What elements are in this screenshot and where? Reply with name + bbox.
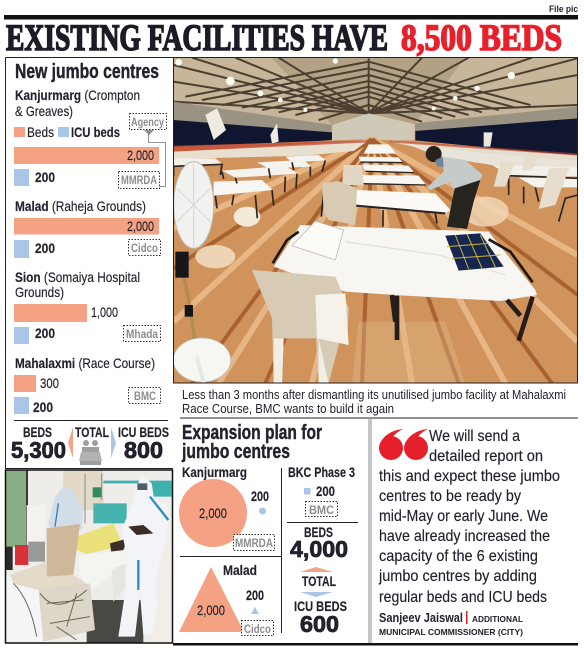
side walls <box>174 102 332 133</box>
totals row: BEDS <box>23 424 52 440</box>
quote text <box>378 428 560 606</box>
front chair <box>252 270 349 383</box>
front bed <box>274 225 537 301</box>
quote text: centres to be ready by <box>379 488 521 505</box>
heading: expansion plan: Expansion plan for <box>182 422 322 444</box>
photo caption: Race Course, BMC wants to build it again <box>182 402 394 416</box>
expansion totals: 4,000 <box>290 536 348 562</box>
legend: beds and ICU beds <box>14 124 120 140</box>
Malad entry: Malad (Raheja Grounds) <box>15 198 146 214</box>
quote text: capacity of the 6 existing <box>379 548 538 565</box>
Kanjurmarg circle chart: 200 <box>251 488 269 504</box>
pedestal fan <box>174 162 214 248</box>
totals row <box>11 424 169 465</box>
expansion totals: TOTAL <box>302 573 336 589</box>
totals row: 800 <box>124 437 163 463</box>
floor <box>174 139 389 152</box>
far rows of beds <box>174 140 369 159</box>
BKC Phase 3: BKC Phase 3 <box>288 464 355 480</box>
quote text: mid-May or early June. We <box>379 508 548 525</box>
Malad triangle chart: 200 <box>246 587 264 603</box>
quote attribution: MUNICIPAL COMMISSIONER (CITY) <box>379 627 523 637</box>
panel: expansion plan <box>179 422 358 637</box>
heading: expansion plan: jumbo centres <box>181 441 290 463</box>
quote text: regular beds and ICU beds <box>379 589 547 606</box>
ceiling <box>174 58 578 125</box>
BKC Phase 3: BMC <box>309 503 334 517</box>
agency tag: MMRDA <box>118 172 160 188</box>
person making bed <box>427 157 483 190</box>
chairs <box>342 165 364 185</box>
quote attribution: ADDITIONAL <box>472 614 523 624</box>
bottom rule <box>173 643 578 646</box>
quote attribution: Sanjeev Jaiswal <box>379 610 463 625</box>
Sion entry: 200 <box>35 325 55 341</box>
agency tag: MMRDA: MMRDA <box>121 173 157 187</box>
quote text: We will send a <box>429 428 520 445</box>
Mahalaxmi entry: Mahalaxmi (Race Course) <box>15 355 155 371</box>
Kanjurmarg entry: 2,000 <box>127 147 154 163</box>
quote text: detailed report on <box>429 448 543 465</box>
expansion totals: 600 <box>300 611 339 637</box>
Kanjurmarg entry: Kanjurmarg (Crompton <box>15 87 140 103</box>
Malad triangle chart: Malad <box>223 562 257 578</box>
Mahalaxmi entry: 300 <box>40 375 59 391</box>
centre row of beds <box>364 144 396 154</box>
Kanjurmarg circle chart <box>179 464 274 550</box>
Kanjurmarg entry: 200 <box>35 169 55 185</box>
legend: beds and ICU beds: ICU beds <box>71 124 120 140</box>
expansion totals: ICU BEDS <box>294 598 347 614</box>
totals row: 5,300 <box>11 437 66 463</box>
photo: medical staff in PPE with ICU patient <box>5 470 173 643</box>
top rule <box>4 15 578 20</box>
Kanjurmarg circle chart: MMRDA <box>235 536 273 550</box>
hospital bed <box>111 550 124 555</box>
Malad triangle chart <box>179 562 274 636</box>
Sion entry: Sion (Somaiya Hospital <box>15 269 140 285</box>
expansion totals <box>290 524 348 637</box>
quote panel <box>368 419 560 643</box>
Malad triangle chart: 2,000 <box>197 602 225 618</box>
expansion totals: BEDS <box>304 524 333 540</box>
legend: beds and ICU beds: Beds <box>27 124 54 140</box>
monitor <box>47 524 80 577</box>
quote text: this and expect these jumbo <box>379 468 560 485</box>
credit: file pic: File pic <box>549 4 578 14</box>
Mahalaxmi entry: 200 <box>33 399 53 415</box>
Malad entry: 200 <box>35 240 55 256</box>
Kanjurmarg entry <box>14 87 159 186</box>
photo caption <box>182 388 566 416</box>
agency tag: Mhada: Mhada <box>126 327 158 341</box>
title: EXISTING FACILITIES HAVE <box>6 18 388 59</box>
quote text: jumbo centres by adding <box>378 568 537 585</box>
Sion entry: 1,000 <box>91 304 118 320</box>
photo: jumbo facility ward with beds <box>173 58 578 383</box>
totals row: ICU BEDS <box>118 424 169 440</box>
Kanjurmarg circle chart: Kanjurmarg <box>182 464 247 480</box>
heading: new jumbo centres: New jumbo centres <box>15 61 159 83</box>
left PPE person <box>48 487 83 530</box>
agency tag: BMC: BMC <box>134 389 156 403</box>
agency tag: Cidco: Cidco <box>131 241 158 255</box>
Malad triangle chart: Cidco <box>244 622 271 636</box>
quote text: have already increased the <box>379 528 550 545</box>
icon: red quote marks <box>379 429 428 460</box>
yellow blanket <box>76 523 121 554</box>
Kanjurmarg entry: & Greaves) <box>15 103 73 119</box>
panel: new jumbo centres <box>6 58 173 468</box>
Malad entry: 2,000 <box>127 218 154 234</box>
heading: expansion plan <box>181 422 322 463</box>
Sion entry: Grounds) <box>15 284 64 300</box>
equipment trolley <box>38 583 95 642</box>
Sion entry <box>14 269 140 344</box>
totals row: TOTAL <box>75 424 109 440</box>
Mahalaxmi entry <box>14 355 155 415</box>
icon: bed with two people <box>79 440 102 465</box>
agency key with connector: Agency <box>131 115 164 129</box>
right PPE person <box>118 475 168 637</box>
BKC Phase 3: 200 <box>316 483 335 499</box>
quote attribution <box>379 610 523 637</box>
BKC Phase 3 <box>288 464 355 517</box>
Malad entry <box>14 198 159 258</box>
agency key with connector <box>130 114 166 186</box>
Kanjurmarg circle chart: 2,000 <box>199 505 227 521</box>
